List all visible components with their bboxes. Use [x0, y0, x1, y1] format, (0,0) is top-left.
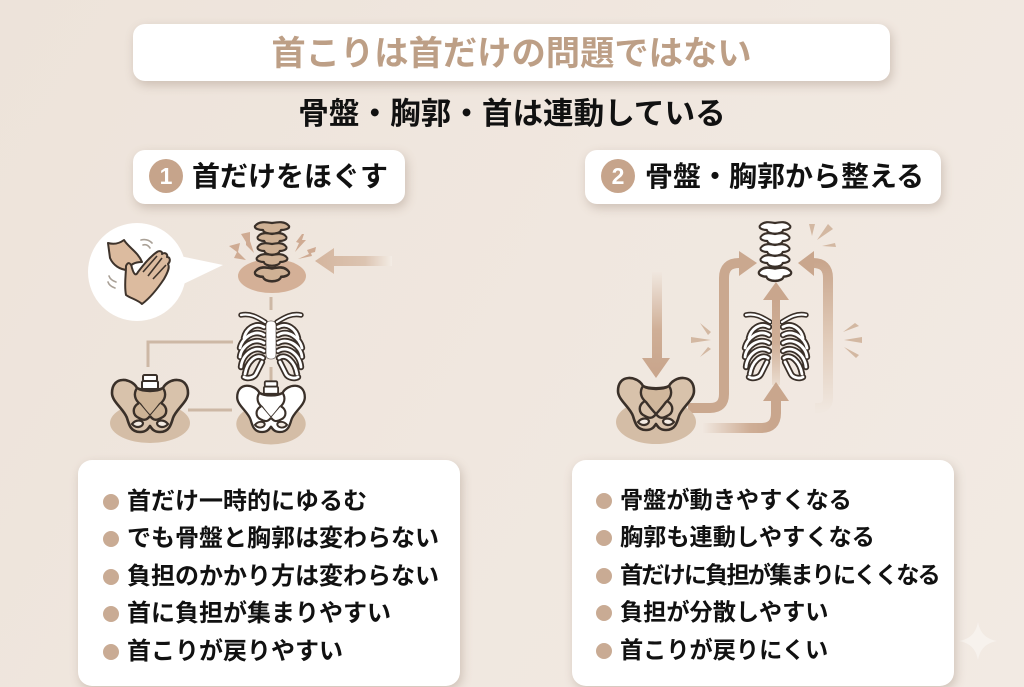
- panel: option 1 results: [78, 460, 460, 686]
- panel 1 illustration: neck-only massage: [88, 222, 392, 444]
- heading: option 1: [133, 150, 405, 204]
- list item 2: でも骨盤と胸郭は変わらない: [127, 525, 439, 552]
- icon: ribcage: [240, 314, 302, 378]
- arrow: pelvis to ribcage: [703, 382, 789, 428]
- icon: healthy cervical spine: [759, 222, 791, 281]
- heading text 2: 骨盤・胸郭から整える: [645, 161, 924, 192]
- list item 5: 首こりが戻りやすい: [127, 638, 343, 665]
- icon: pelvis: [616, 378, 696, 444]
- list item 2: 胸郭も連動しやすくなる: [620, 524, 875, 550]
- icon: sparkle: [959, 622, 997, 660]
- title banner: [133, 24, 890, 81]
- arrow down to pelvis: [642, 272, 670, 378]
- list item 5: 首こりが戻りにくい: [620, 637, 828, 663]
- neck base ellipse: [238, 259, 306, 293]
- list item 4: 負担が分散しやすい: [620, 599, 828, 625]
- list item 3: 首だけに負担が集まりにくくなる: [620, 562, 939, 588]
- arrow: pelvis to spine: [688, 251, 757, 408]
- icon: pain bolts: [229, 232, 316, 260]
- arrow pointing to neck: [315, 248, 392, 274]
- sternum: [266, 321, 276, 359]
- icon: radiating marks: [691, 224, 862, 358]
- icon: pelvis tan: [110, 375, 190, 443]
- number badge 2: 2: [612, 163, 624, 189]
- number badge 2: [601, 159, 635, 193]
- subtitle: 骨盤・胸郭・首は連動している: [298, 97, 726, 131]
- panel: option 2 results: [572, 460, 954, 686]
- icon: pelvis white: [236, 381, 306, 444]
- icon: hand massage callout: [88, 223, 223, 321]
- number badge 1: 1: [160, 163, 172, 189]
- icon: cervical spine in pain: [255, 222, 289, 281]
- arrow up through ribcage: [763, 282, 789, 385]
- number badge 1: [149, 159, 183, 193]
- icon: ribcage: [745, 314, 807, 378]
- list item 3: 負担のかかり方は変わらない: [127, 563, 439, 590]
- title text: 首こりは首だけの問題ではない: [271, 35, 752, 73]
- list item 4: 首に負担が集まりやすい: [127, 600, 391, 627]
- heading text 1: 首だけをほぐす: [192, 161, 388, 192]
- list item 1: 首だけ一時的にゆるむ: [127, 488, 367, 515]
- arrow: right side to spine: [798, 251, 828, 408]
- heading: option 2: [585, 150, 941, 204]
- list item 1: 骨盤が動きやすくなる: [620, 487, 852, 513]
- connector lines: [148, 297, 271, 410]
- panel 2 illustration: whole-body linkage: [616, 222, 862, 444]
